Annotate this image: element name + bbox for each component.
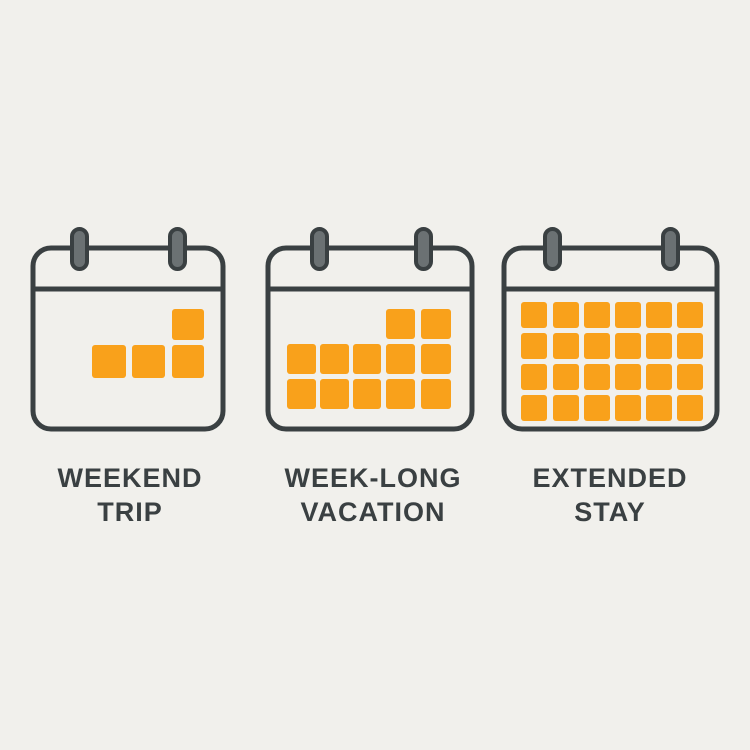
label: week-long vacation: WEEK-LONG bbox=[284, 463, 462, 493]
label: extended stay bbox=[532, 463, 688, 527]
label: week-long vacation bbox=[284, 463, 462, 527]
label: extended stay: STAY bbox=[574, 497, 646, 527]
label: weekend trip: WEEKEND bbox=[57, 463, 202, 493]
icon: extended stay calendar bbox=[504, 229, 717, 429]
label: weekend trip bbox=[57, 463, 202, 527]
label: week-long vacation: VACATION bbox=[300, 497, 446, 527]
icon: week-long calendar bbox=[268, 229, 472, 429]
icon: weekend calendar bbox=[33, 229, 223, 429]
label: extended stay: EXTENDED bbox=[532, 463, 688, 493]
label: weekend trip: TRIP bbox=[97, 497, 163, 527]
